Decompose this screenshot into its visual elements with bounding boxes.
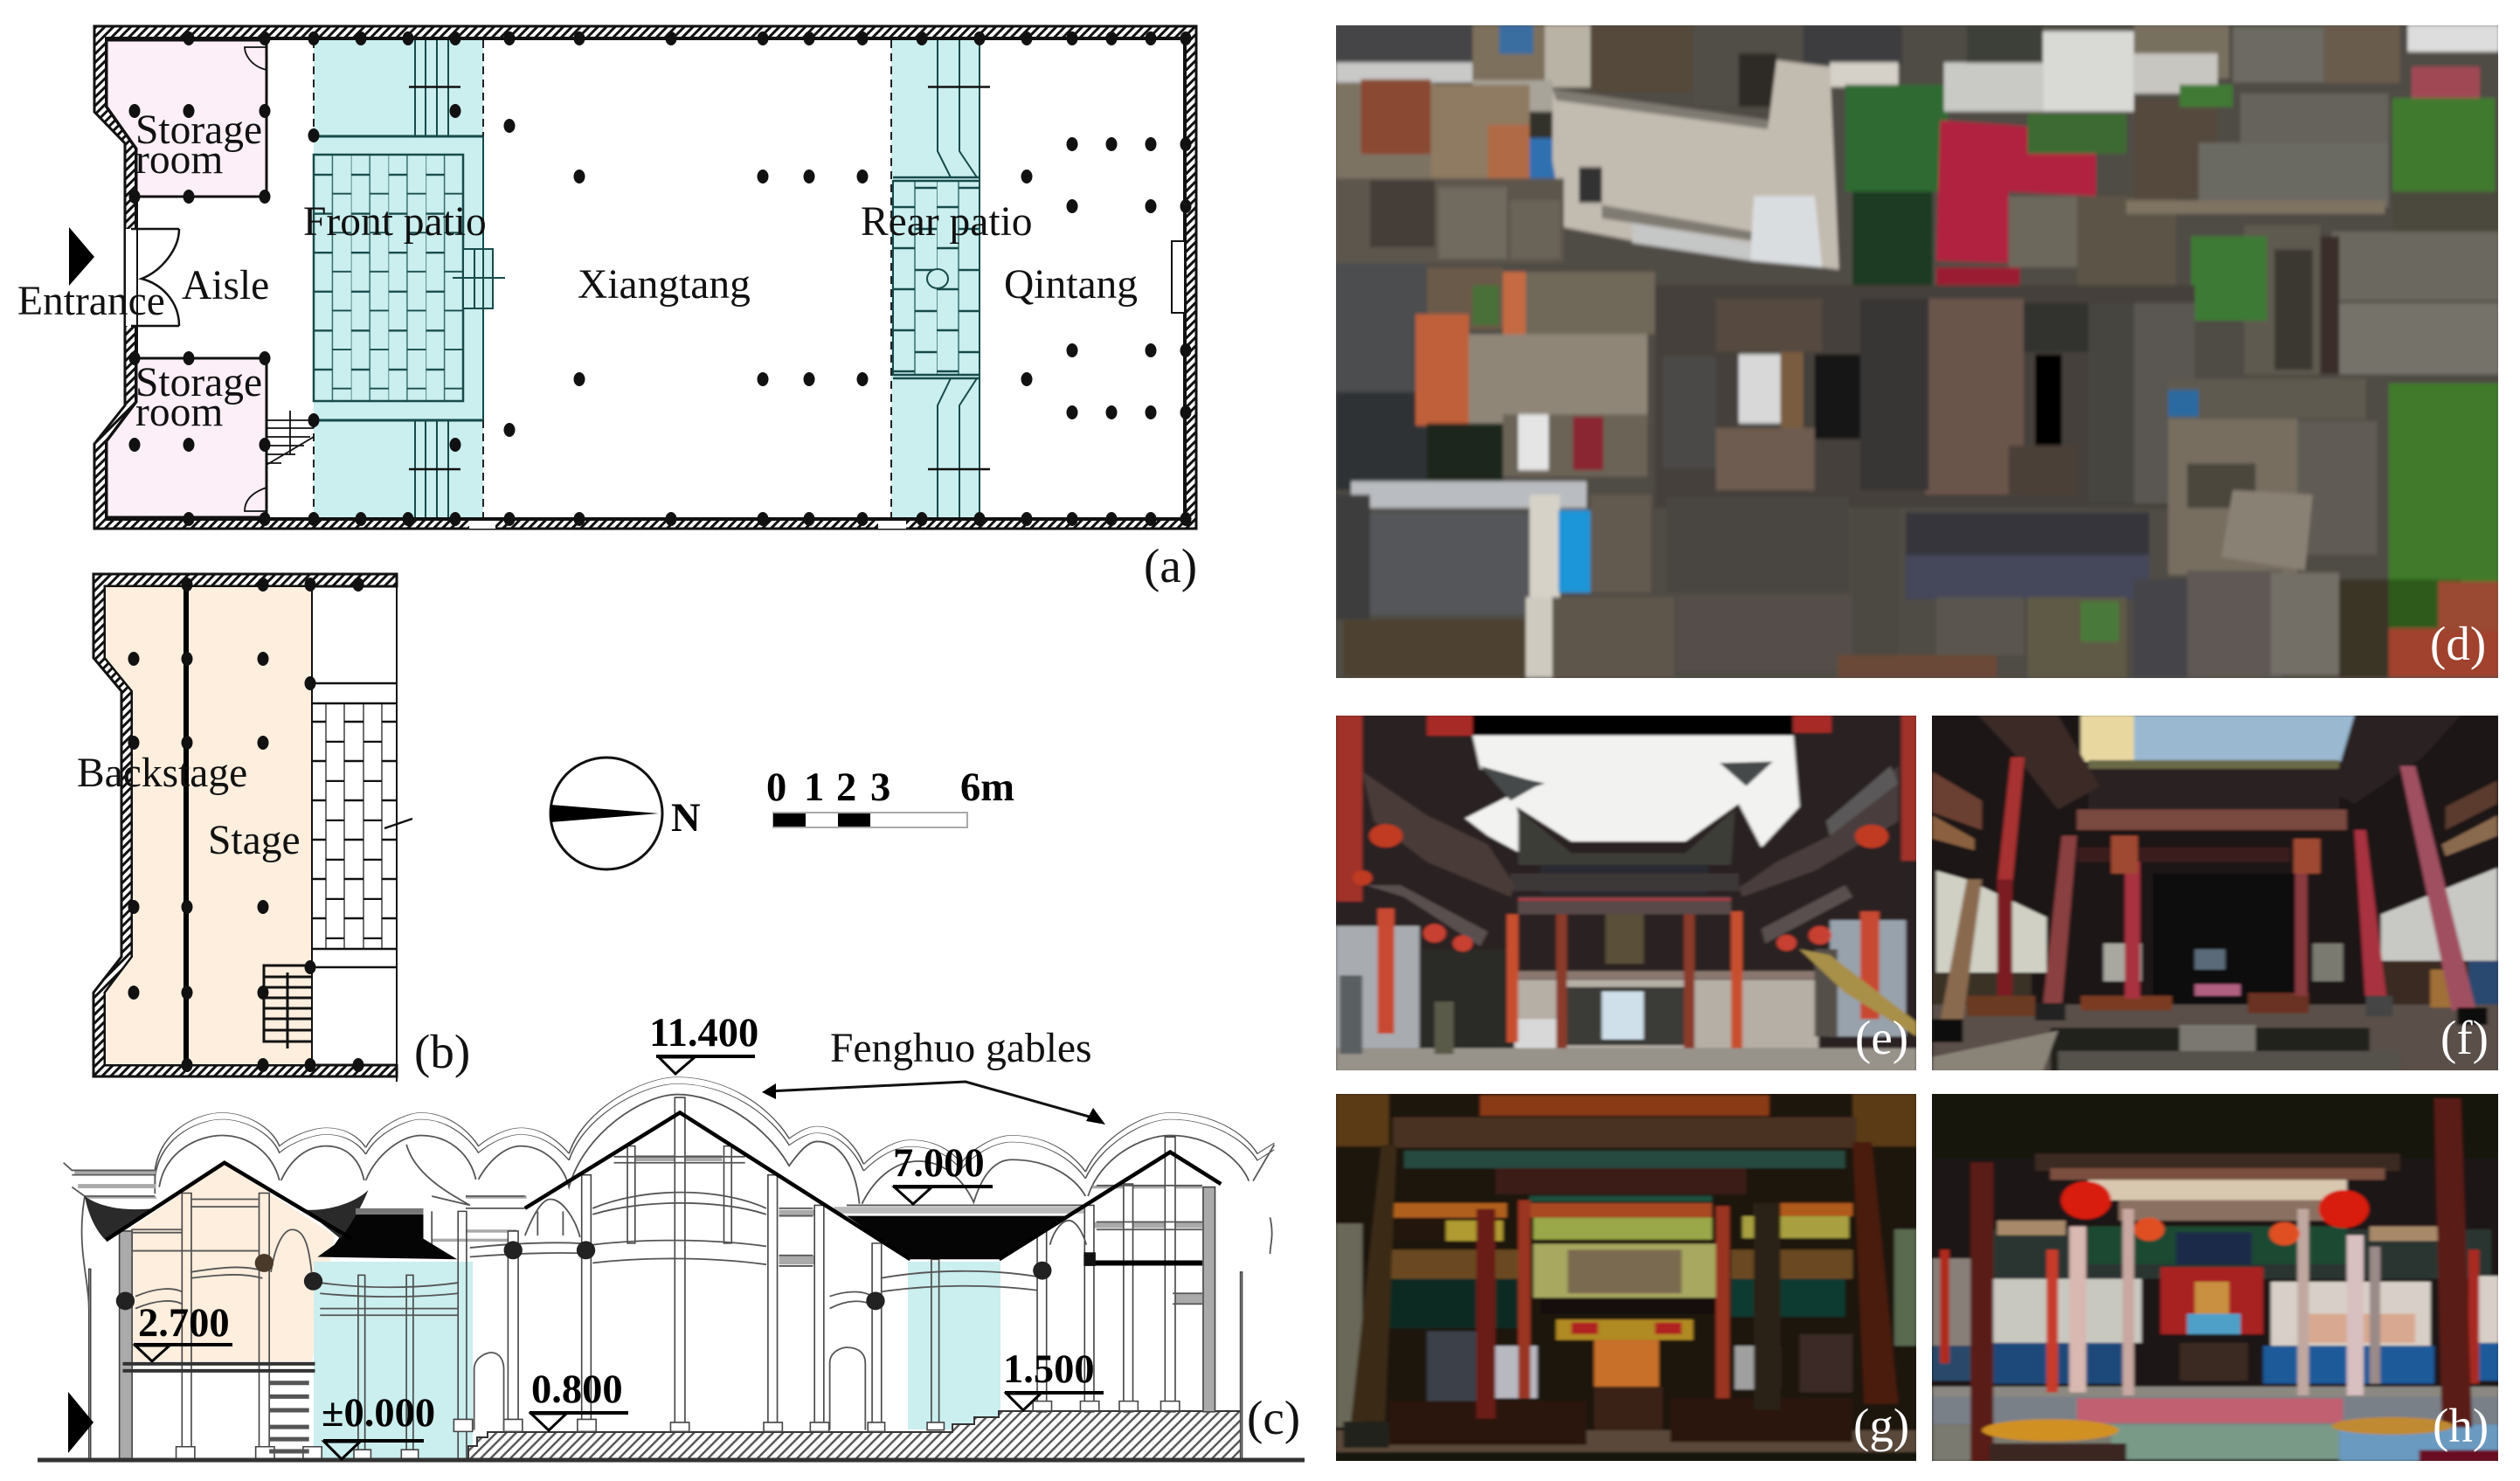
room: storage room north	[107, 40, 267, 197]
elevation mark 1.500	[1003, 1347, 1104, 1410]
photo label (g): (g)	[1853, 1399, 1909, 1452]
roof rafters	[106, 1112, 1221, 1259]
elevation mark 0.800	[530, 1367, 628, 1430]
panel: upper floor plan (b)	[77, 574, 470, 1082]
patio paving below	[312, 683, 412, 967]
scale bar: 2	[836, 765, 856, 810]
Xiangtang image blocks	[1328, 1090, 1928, 1465]
front patio	[314, 40, 505, 517]
stage stair	[264, 965, 312, 1048]
photo (f): front hall interior	[1921, 710, 2514, 1077]
dark beam sections	[116, 1241, 1051, 1310]
timber columns	[89, 1097, 1243, 1460]
plan room labels: Xiangtang	[578, 262, 751, 308]
plan room labels: Qintang	[1004, 262, 1138, 308]
callout: fenghuo gables with arrows	[762, 1026, 1105, 1125]
arrow: section entrance	[68, 1392, 93, 1453]
plan room labels: room	[135, 137, 223, 183]
Qintang image blocks	[1921, 1090, 2514, 1465]
panel: longitudinal section (c)	[38, 1011, 1305, 1460]
staircase under stage	[269, 1383, 309, 1451]
panel: ground floor plan (a)	[17, 26, 1197, 592]
column bases	[177, 1401, 1180, 1460]
section colour zones	[127, 1164, 1000, 1459]
elevation mark 11.400: 11.400	[649, 1011, 758, 1055]
plan room labels: Storage	[135, 107, 262, 153]
ground line	[38, 1457, 1305, 1463]
upper floor labels: (b)	[414, 1025, 470, 1078]
photo (g): Xiangtang interior	[1328, 1090, 1928, 1465]
photo label (d): (d)	[2430, 617, 2486, 670]
elevation mark 0.000: ±0.000	[322, 1391, 435, 1436]
aerial image blocks	[1328, 17, 2514, 686]
upper floor labels	[77, 751, 470, 1078]
section label: (c)	[1247, 1391, 1300, 1444]
elevation mark 2.700: 2.700	[138, 1301, 230, 1346]
scale bar	[766, 765, 1014, 827]
black roof sections	[85, 1190, 1067, 1259]
plan room labels	[17, 107, 1197, 592]
upper floor labels: Backstage	[77, 751, 247, 796]
icon: north compass: N	[671, 796, 701, 841]
columns	[129, 31, 1192, 526]
elevation mark 7.000: 7.000	[893, 1141, 985, 1186]
scale bar: 6m	[960, 765, 1014, 810]
inner doors and stair	[245, 47, 314, 511]
elevation mark 0.800: 0.800	[531, 1367, 623, 1412]
photo label (h): (h)	[2433, 1399, 2489, 1452]
photo label (e): (e)	[1855, 1011, 1908, 1064]
eave bands	[74, 1155, 1202, 1304]
plan room labels: Front patio	[303, 199, 487, 245]
plan room labels: room	[135, 390, 223, 435]
scale bar: 0	[766, 765, 786, 810]
room: storage room south	[107, 358, 267, 517]
plan walls	[94, 26, 1196, 529]
upper floor columns	[128, 578, 363, 1072]
section framing in elevation	[64, 1077, 1274, 1460]
hall image blocks	[1921, 710, 2514, 1077]
courtyard image blocks	[1328, 710, 1928, 1077]
fenghuo gable outlines	[155, 1077, 1274, 1204]
upper floor labels: Stage	[208, 818, 301, 863]
photo label (f): (f)	[2440, 1011, 2489, 1064]
entrance doors	[131, 229, 179, 326]
upper floor walls	[93, 574, 397, 1082]
photo (e): courtyard view	[1328, 710, 1928, 1077]
stage partition	[183, 586, 189, 1065]
elevation mark 1.500: 1.500	[1003, 1347, 1095, 1392]
plan room labels: (a)	[1144, 539, 1197, 592]
scale bar: 3	[870, 765, 890, 810]
elevation mark 2.700	[134, 1301, 232, 1361]
floor beam	[123, 1364, 315, 1371]
arrow: entrance marker	[69, 227, 94, 286]
icon: north compass	[550, 758, 701, 869]
photo (d): aerial view	[1328, 17, 2514, 686]
elevation mark 7.000	[893, 1141, 993, 1204]
callout: fenghuo gables with arrows: Fenghuo gables	[830, 1026, 1091, 1071]
rear patio	[891, 40, 990, 517]
scale bar: 1	[804, 765, 824, 810]
beams and ties	[64, 1145, 1274, 1430]
photo (h): Qintang interior	[1921, 1090, 2514, 1465]
stage and backstage area	[105, 586, 312, 1065]
plan room labels: Aisle	[182, 263, 269, 308]
plan room labels: Entrance	[17, 279, 165, 324]
plan room labels: Storage	[135, 360, 262, 405]
plan room labels: Rear patio	[861, 199, 1033, 245]
stepped ground hatch	[468, 1411, 1241, 1460]
elevation mark 0.000	[322, 1391, 435, 1459]
